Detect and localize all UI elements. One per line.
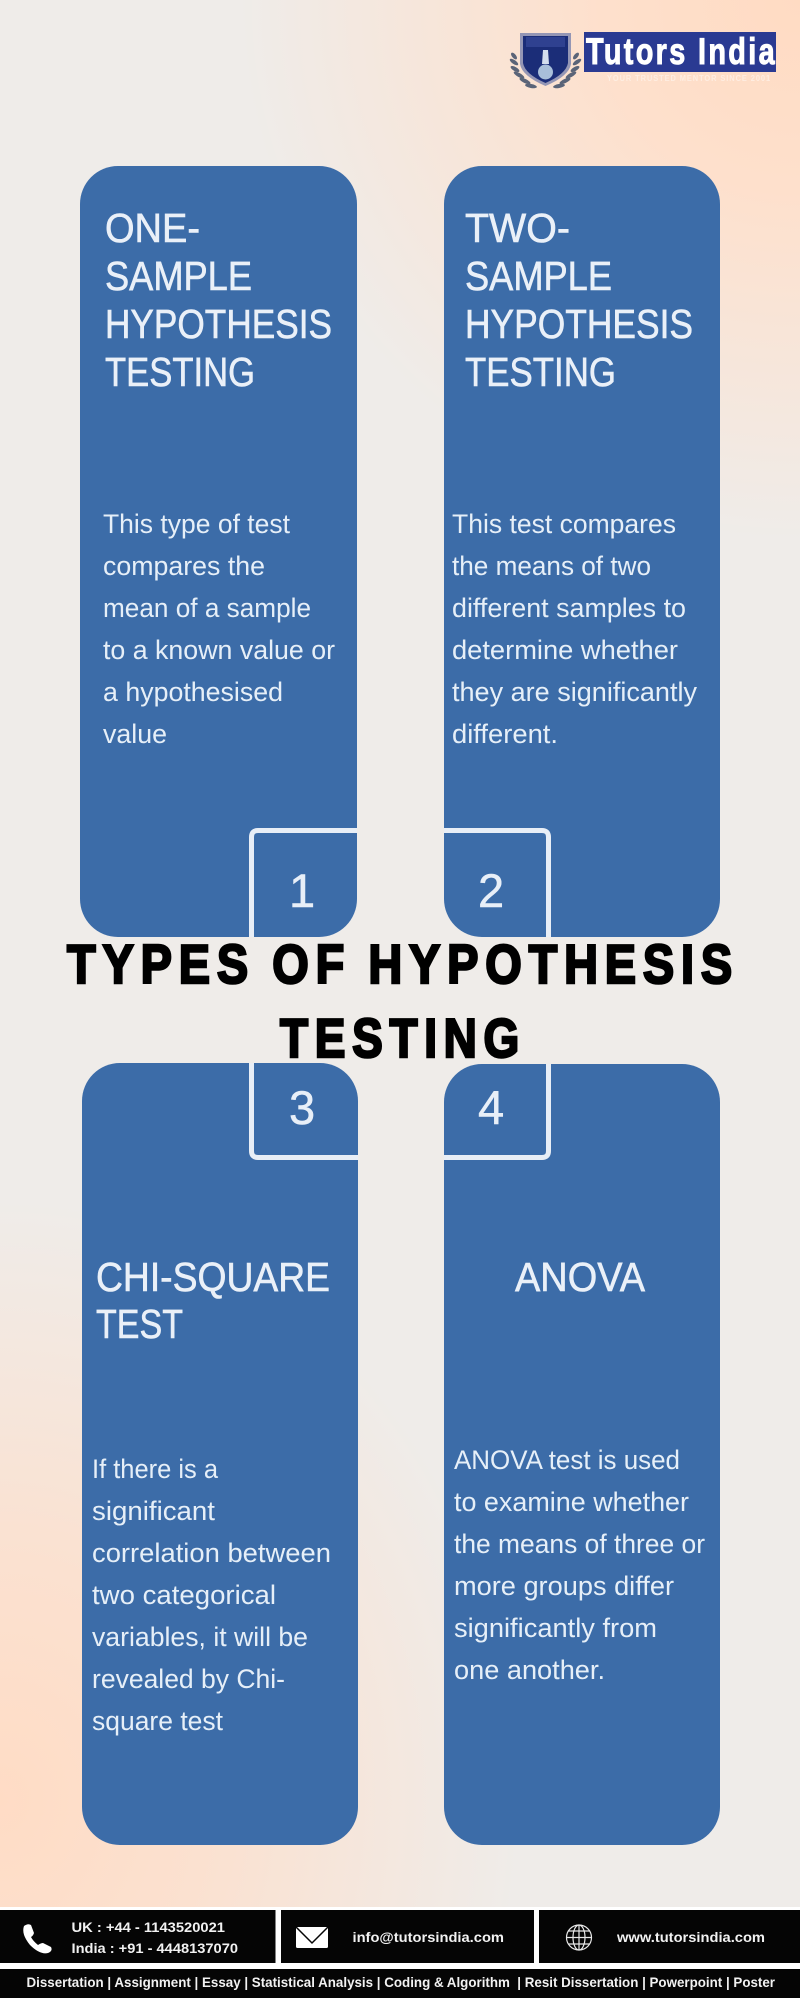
tagline: YOUR TRUSTED MENTOR SINCE 2001 bbox=[607, 74, 771, 83]
icon: laurel wreath bbox=[509, 52, 582, 89]
contact box: phone: UK : +44 - 1143520021 bbox=[72, 1919, 225, 1935]
number tab 4: 4 bbox=[478, 1081, 504, 1134]
services bar: Dissertation | Assignment | Essay | Statistical Analysis | Coding & Algorithm | Resit Dissertation | Powerpoint | Poster bbox=[26, 1974, 776, 1990]
description: compares the bbox=[103, 551, 265, 581]
card background bbox=[82, 1063, 358, 1845]
heading bbox=[105, 205, 332, 395]
description: This test compares bbox=[452, 509, 676, 539]
card background bbox=[444, 1064, 720, 1845]
heading bbox=[96, 1254, 330, 1347]
services bar bbox=[0, 1969, 800, 1998]
number tab 2: 2 bbox=[478, 864, 504, 917]
banner bbox=[584, 32, 776, 72]
description: significant bbox=[92, 1496, 215, 1526]
heading: TWO- bbox=[465, 205, 570, 251]
description: more groups differ bbox=[454, 1571, 674, 1601]
description bbox=[103, 509, 335, 749]
contact box: website bbox=[539, 1910, 800, 1963]
description: two categorical bbox=[92, 1580, 276, 1610]
description: value bbox=[103, 719, 167, 749]
card background bbox=[444, 166, 720, 937]
heading: ONE- bbox=[105, 205, 200, 251]
heading: TEST bbox=[96, 1301, 183, 1347]
number tab 2 bbox=[444, 830, 548, 937]
description bbox=[452, 509, 697, 749]
description: mean of a sample bbox=[103, 593, 311, 623]
panel: two-sample hypothesis testing bbox=[444, 166, 720, 937]
contact box: website: www.tutorsindia.com bbox=[616, 1929, 765, 1945]
description: the means of three or bbox=[454, 1529, 705, 1559]
description: different. bbox=[452, 719, 558, 749]
number tab 1 bbox=[252, 830, 357, 937]
heading: CHI-SQUARE bbox=[96, 1254, 330, 1300]
card background bbox=[80, 166, 357, 937]
footer bbox=[0, 1907, 800, 2000]
description bbox=[92, 1454, 331, 1736]
panel: one-sample hypothesis testing bbox=[80, 166, 357, 937]
description: different samples to bbox=[452, 593, 686, 623]
description: the means of two bbox=[452, 551, 651, 581]
number tab 4 bbox=[444, 1064, 548, 1158]
heading: SAMPLE bbox=[105, 253, 252, 299]
icon: shield bbox=[520, 33, 571, 86]
description: revealed by Chi- bbox=[92, 1664, 285, 1694]
description: If there is a bbox=[92, 1454, 219, 1484]
panel: anova bbox=[444, 1064, 720, 1845]
description: correlation between bbox=[92, 1538, 331, 1568]
icon: phone bbox=[23, 1924, 52, 1953]
heading bbox=[465, 205, 693, 395]
heading: HYPOTHESIS bbox=[105, 301, 332, 347]
description: determine whether bbox=[452, 635, 678, 665]
contact box: email: info@tutorsindia.com bbox=[352, 1929, 504, 1945]
description: to examine whether bbox=[454, 1487, 689, 1517]
description: square test bbox=[92, 1706, 223, 1736]
heading: SAMPLE bbox=[465, 253, 612, 299]
heading: ANOVA bbox=[515, 1254, 646, 1300]
description: they are significantly bbox=[452, 677, 697, 707]
title: TESTING bbox=[280, 1007, 526, 1069]
description: This type of test bbox=[103, 509, 290, 539]
logo: Tutors India bbox=[509, 31, 777, 89]
title bbox=[67, 933, 739, 1069]
contact box: phone: India : +91 - 4448137070 bbox=[72, 1940, 238, 1956]
heading: TESTING bbox=[105, 349, 255, 395]
number tab 3: 3 bbox=[289, 1081, 315, 1134]
description: variables, it will be bbox=[92, 1622, 308, 1652]
description: a hypothesised bbox=[103, 677, 283, 707]
description: one another. bbox=[454, 1655, 605, 1685]
number tab 1: 1 bbox=[289, 864, 315, 917]
icon: globe bbox=[566, 1925, 592, 1950]
heading: HYPOTHESIS bbox=[465, 301, 693, 347]
description: significantly from bbox=[454, 1613, 657, 1643]
description bbox=[454, 1445, 705, 1685]
heading: TESTING bbox=[465, 349, 616, 395]
description: ANOVA test is used bbox=[454, 1445, 680, 1475]
description: to a known value or bbox=[103, 635, 335, 665]
contact box: email bbox=[281, 1910, 534, 1963]
number tab 3 bbox=[252, 1063, 358, 1158]
contact box: phone bbox=[0, 1910, 276, 1963]
icon: envelope bbox=[296, 1927, 328, 1948]
panel: chi-square test bbox=[82, 1063, 358, 1845]
